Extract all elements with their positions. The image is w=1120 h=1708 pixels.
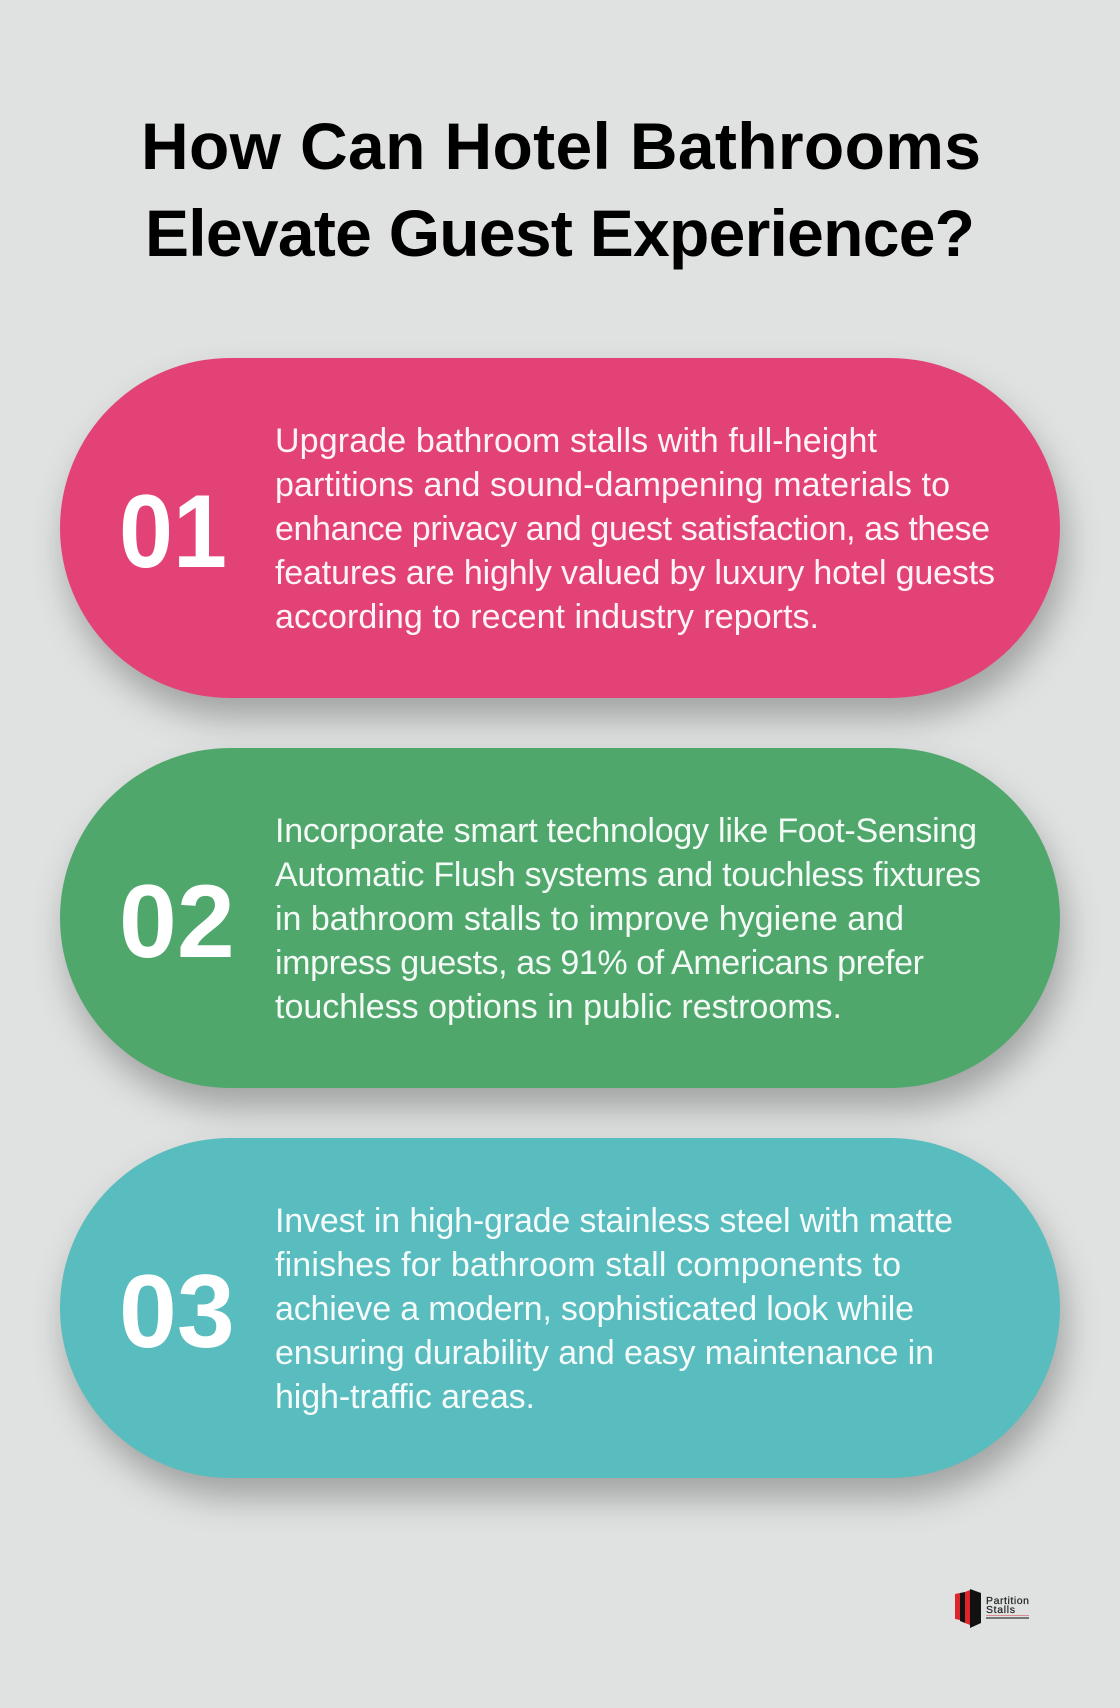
- text: step 02: impress guests, as 91% of Americans prefer: [275, 944, 924, 982]
- panel: step 01: [60, 358, 1066, 718]
- text: step 02: in bathroom stalls to improve hygiene and: [275, 900, 904, 938]
- number 01: 01: [119, 474, 227, 590]
- text: step 02: Automatic Flush systems and touchless fixtures: [275, 856, 981, 894]
- text: step 03: high-traffic areas.: [275, 1378, 535, 1416]
- title: Elevate Guest Experience?: [145, 196, 975, 270]
- text: step 03: achieve a modern, sophisticated look while: [275, 1290, 914, 1328]
- text: step 03: ensuring durability and easy maintenance in: [275, 1334, 934, 1372]
- text: step 01: partitions and sound-dampening materials to: [275, 466, 950, 504]
- text: step 02: touchless options in public restrooms.: [275, 988, 842, 1026]
- logo wordmark: [986, 1595, 1029, 1619]
- text: step 01: features are highly valued by luxury hotel guests: [275, 554, 995, 592]
- logo wordmark: Stalls: [986, 1604, 1015, 1616]
- number 02: 02: [119, 864, 235, 980]
- text: step 03: finishes for bathroom stall components to: [275, 1246, 901, 1284]
- text: step 02: [275, 812, 981, 1026]
- icon: partition bars: [955, 1589, 981, 1628]
- text: step 01: [275, 422, 995, 636]
- logo: Partition Stalls: [955, 1589, 1029, 1628]
- title: [141, 109, 981, 270]
- panel: step 03: [60, 1138, 1066, 1498]
- text: step 01: Upgrade bathroom stalls with full-height: [275, 422, 878, 460]
- text: step 01: enhance privacy and guest satisfaction, as these: [275, 510, 990, 548]
- number 03: 03: [119, 1254, 235, 1370]
- text: step 02: Incorporate smart technology like Foot-Sensing: [275, 812, 977, 850]
- logo wordmark: Partition: [986, 1595, 1029, 1607]
- text: step 03: Invest in high-grade stainless steel with matte: [275, 1202, 953, 1240]
- text: step 03: [275, 1202, 953, 1416]
- text: step 01: according to recent industry reports.: [275, 598, 819, 636]
- panel: step 02: [60, 748, 1066, 1108]
- title: How Can Hotel Bathrooms: [141, 109, 981, 183]
